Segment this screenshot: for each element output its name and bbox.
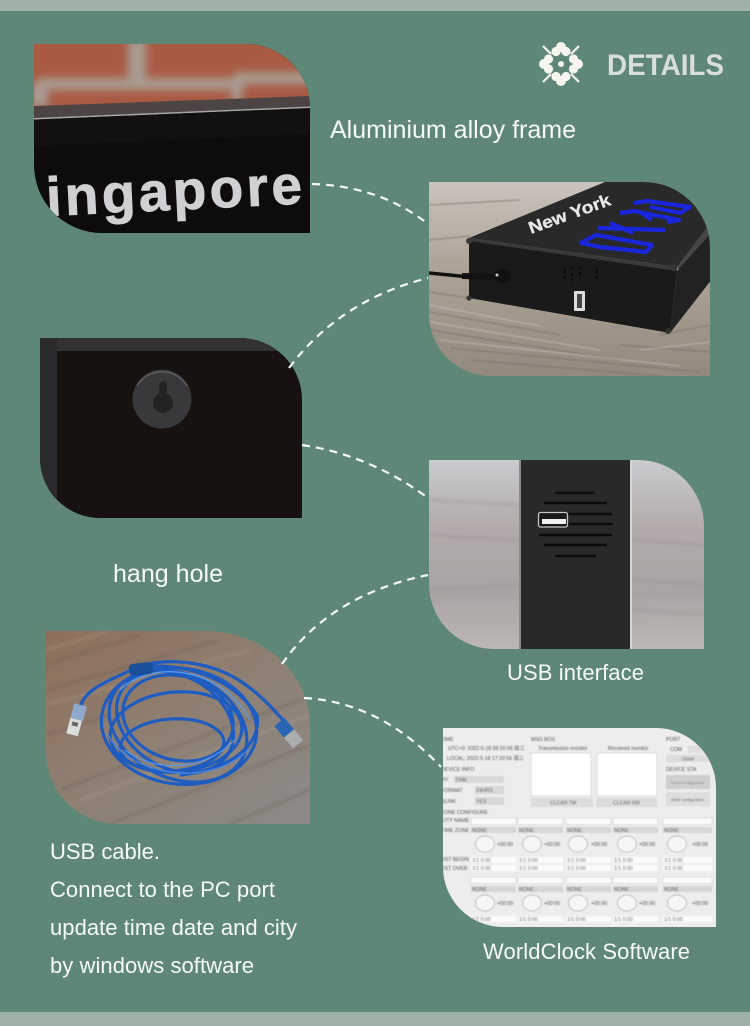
zone column 2 (518, 818, 563, 923)
caption: usb cable description: USB cable. (50, 839, 160, 864)
time section: TIME (441, 737, 454, 743)
message box: Transmission monitor (538, 746, 588, 752)
zone column 4: 1/1 0:00 (614, 858, 633, 864)
caption: worldclock software: WorldClock Software (483, 939, 690, 964)
time section (441, 737, 525, 762)
speaker slots (539, 493, 613, 556)
zone column 1: 1/1 0:00 (472, 866, 491, 872)
zone column 5: NONE (664, 828, 680, 834)
zone column 5 (663, 818, 712, 923)
icon: keyhole mount (132, 370, 192, 428)
power cable (429, 268, 511, 284)
zone column 2: NONE (519, 887, 535, 893)
message box: MSG BOX (531, 737, 556, 743)
clock body (466, 182, 720, 334)
zone column 2: NONE (519, 828, 535, 834)
message box (531, 737, 657, 807)
zone column 2: 1/1 0:00 (519, 866, 538, 872)
zone column 4: NONE (614, 887, 630, 893)
time section: LOCAL: 2022-5-18 17:20:56 周三 (447, 755, 524, 762)
zone column 1: 1/1 0:00 (472, 858, 491, 864)
zone column 3: +00:00 (591, 842, 607, 848)
device info section: DEVICE INFO (441, 767, 474, 773)
zone column 4: 1/1 0:00 (614, 917, 633, 923)
panel: usb interface photo (429, 460, 704, 649)
city label: New York: New York (526, 190, 614, 238)
zone column 5: 1/1 0:00 (664, 858, 683, 864)
caption: usb cable description (50, 839, 297, 978)
zone column 3: NONE (567, 828, 583, 834)
caption: hang hole: hang hole (113, 560, 223, 588)
zone column 2: +00:00 (544, 901, 560, 907)
arrow: hang hole to usb interface (302, 445, 428, 498)
port section: PORT (666, 737, 681, 743)
blue digits (581, 201, 690, 252)
usb port (538, 512, 568, 527)
zone column 1: NONE (472, 887, 488, 893)
device info section: FORMAT (441, 788, 463, 794)
arrow: hang hole to clock (289, 278, 428, 368)
caption: usb cable description: update time date and city (50, 915, 297, 940)
arrow: cable to software (304, 698, 441, 767)
heading: details (539, 42, 724, 86)
frame edge (34, 96, 310, 120)
zone column 1: +00:00 (497, 842, 513, 848)
message box: CLEAN TM (550, 800, 576, 806)
panel: worldclock software screenshot (441, 728, 716, 927)
zone column 4: +00:00 (639, 901, 655, 907)
black strip (519, 460, 632, 649)
zone column 3: NONE (567, 887, 583, 893)
time section: UTC+0: 2022-5-18 09:20:56 周三 (448, 745, 525, 752)
zone column 4: 1/1 0:00 (614, 866, 633, 872)
zone column 5: +00:00 (692, 901, 708, 907)
usb port (574, 291, 585, 311)
usb connector left (66, 703, 87, 737)
port section: Write configuration (671, 797, 704, 802)
zone column 2: 1/1 0:00 (519, 858, 538, 864)
zone column 2: 1/1 0:00 (519, 917, 538, 923)
ferrite bead (128, 662, 154, 676)
zone column 3: 1/1 0:00 (567, 858, 586, 864)
caption: usb cable description: by windows software (50, 953, 254, 978)
zone configure labels: CITY NAME (441, 818, 470, 824)
panel: usb cable photo (46, 631, 310, 824)
zone configure labels: ZONE CONFIGURE (441, 810, 489, 816)
device info section (441, 767, 504, 805)
zone column 1 (471, 818, 516, 923)
port section: DEVICE STA (666, 767, 697, 773)
bottom band (0, 1012, 750, 1026)
message box: CLEAN RM (613, 800, 640, 806)
zone configure labels: TIME ZONE (441, 828, 470, 834)
port section (666, 737, 710, 806)
top band (0, 0, 750, 11)
usb connector right (274, 718, 303, 748)
panel: clock side photo (429, 182, 720, 376)
blue cable (79, 660, 284, 786)
device info section: 24HRS (476, 788, 493, 794)
zone column 1: NONE (472, 828, 488, 834)
wood surface (429, 182, 710, 376)
port section: Read configuration (671, 780, 705, 785)
zone column 4: NONE (614, 828, 630, 834)
arrow: frame to clock (312, 184, 428, 224)
zone configure labels (441, 810, 489, 872)
zone column 4: +00:00 (639, 842, 655, 848)
zone column 3 (566, 818, 611, 923)
frame label: ingapore: ingapore (45, 154, 303, 228)
wood surface (46, 631, 310, 824)
zone column 4 (613, 818, 658, 923)
caption: usb interface: USB interface (507, 660, 644, 685)
zone column 1: +00:00 (497, 901, 513, 907)
zone column 5: 1/1 0:00 (664, 866, 683, 872)
device info section: TIME (455, 778, 468, 784)
zone column 3: 1/1 0:00 (567, 917, 586, 923)
zone configure labels: DST BEGIN (441, 857, 469, 863)
arrow: cable to usb interface (282, 575, 428, 664)
speaker holes (565, 266, 597, 283)
caption: aluminium alloy frame: Aluminium alloy frame (330, 116, 576, 144)
details label: DETAILS (607, 49, 724, 82)
caption: usb cable description: Connect to the PC port (50, 877, 275, 902)
zone column 5: NONE (664, 887, 680, 893)
device info section: BLINK (441, 799, 457, 805)
brick wall (34, 44, 310, 110)
device info section: YES (476, 799, 487, 805)
wood streaks (430, 499, 518, 506)
message box: Received monitor (608, 746, 649, 752)
frame strips (40, 338, 278, 500)
zone column 3: 1/1 0:00 (567, 866, 586, 872)
zone column 5: +00:00 (692, 842, 708, 848)
panel: hang hole photo (40, 338, 302, 518)
zone column 2: +00:00 (544, 842, 560, 848)
software interface (441, 737, 712, 923)
device info section: HV (441, 777, 449, 783)
port section: close (682, 756, 694, 762)
port section: COM (670, 747, 682, 753)
icon: flower (539, 42, 583, 86)
zone configure labels: DST OVER (441, 866, 468, 872)
zone column 3: +00:00 (591, 901, 607, 907)
zone column 1: 1/1 0:00 (472, 917, 491, 923)
panel: aluminium frame photo (30, 38, 315, 233)
zone column 5: 1/1 0:00 (664, 917, 683, 923)
